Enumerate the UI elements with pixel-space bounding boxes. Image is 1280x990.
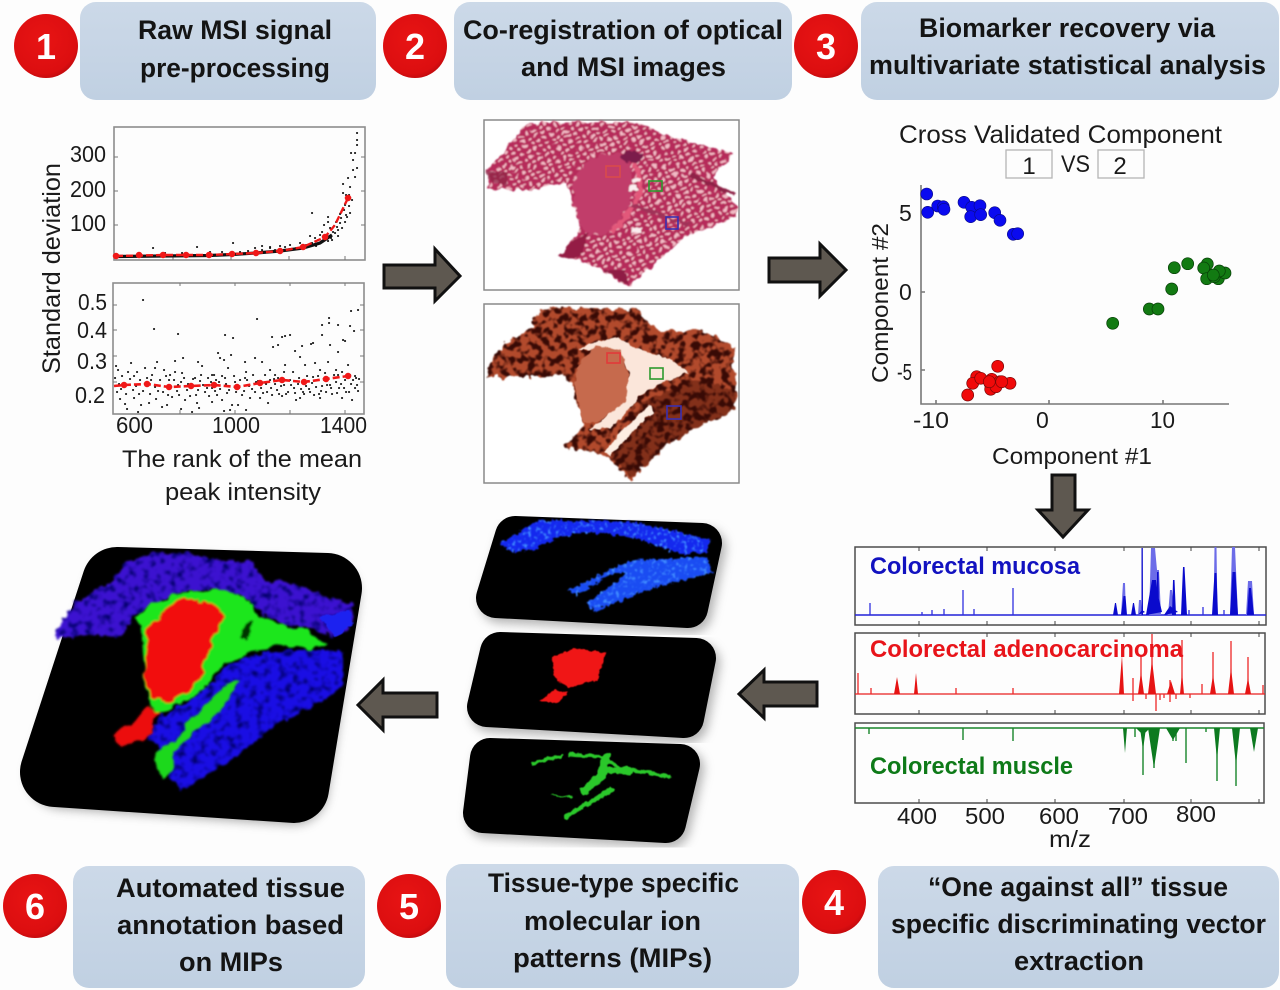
- chart: standard deviation scatter plots: [38, 127, 367, 506]
- axis labels: 10: [1150, 407, 1175, 433]
- panel: step 2 header: and MSI images: [521, 52, 726, 82]
- component selector: 2: [1113, 153, 1127, 180]
- icon: number 1 badge: [14, 14, 78, 78]
- panel: step 4 header: extraction: [1014, 946, 1144, 976]
- panel: step 4 header: “One against all” tissue: [928, 872, 1228, 902]
- panel: step 4 header: specific discriminating vector: [891, 909, 1266, 939]
- panel: step 4 header: [878, 866, 1279, 988]
- spectrum: colorectal adenocarcinoma: [855, 633, 1265, 714]
- green cluster: [1107, 258, 1231, 329]
- panel: step 3 header: multivariate statistical analysis: [869, 50, 1266, 80]
- m/z axis labels: [897, 801, 1216, 852]
- chart: upper plot: [70, 127, 365, 260]
- icon: number 4 badge: 4: [824, 882, 844, 923]
- axis labels: 0: [899, 279, 912, 305]
- panel: optical tissue image: [484, 120, 739, 290]
- axis labels: -10: [913, 407, 949, 433]
- panel: step 5 header: [446, 864, 799, 988]
- chart: lower plot: 0.2: [75, 382, 105, 408]
- panel: step 6 header: Automated tissue: [116, 873, 345, 903]
- chart: upper plot: 100: [70, 210, 106, 236]
- m/z axis labels: m/z: [1049, 826, 1091, 852]
- m/z axis labels: 700: [1108, 803, 1148, 829]
- panel: step 1 header: Raw MSI signal: [138, 15, 332, 45]
- axis labels: Component #1: [992, 443, 1152, 469]
- component selector: [1006, 150, 1144, 180]
- axis labels: 5: [899, 200, 912, 226]
- panel: green muscle ion pattern: [483, 755, 684, 828]
- chart: lower plot: 0.3: [77, 348, 107, 374]
- icon: number 3 badge: [794, 14, 858, 78]
- m/z axis labels: 400: [897, 803, 937, 829]
- panel: red adenocarcinoma ion pattern: [487, 648, 700, 723]
- panel: combined tissue annotation image: [55, 552, 353, 790]
- arrow: step 1 to step 2: [384, 249, 460, 301]
- axis title: rank of the mean peak intensity: peak intensity: [165, 479, 321, 506]
- panel: step 5 header: molecular ion: [524, 906, 701, 936]
- icon: number 3 badge: 3: [816, 26, 836, 67]
- component selector: VS: [1061, 151, 1090, 178]
- chart title: Cross Validated Component: [899, 121, 1222, 149]
- chart: upper plot: 300: [70, 141, 106, 167]
- axis title: rank of the mean peak intensity: [122, 446, 362, 506]
- component selector: 1: [1022, 153, 1036, 180]
- panel: step 3 header: [861, 2, 1279, 100]
- icon: number 2 badge: 2: [405, 26, 425, 67]
- arrow: step 4 to step 5: [739, 670, 817, 718]
- region markers: [606, 166, 678, 229]
- icon: number 5 badge: 5: [399, 886, 419, 927]
- chart: lower plot: 1400: [320, 412, 367, 438]
- MSI tissue map: [488, 307, 738, 480]
- icon: number 5 badge: [377, 874, 441, 938]
- chart: lower plot: 1000: [212, 412, 260, 438]
- chart: discriminating spectra: [855, 547, 1266, 852]
- m/z axis labels: 500: [965, 803, 1005, 829]
- panel: step 5 header: Tissue-type specific: [488, 868, 739, 898]
- panel: step 1 header: [80, 2, 376, 100]
- panel: blue mucosa ion pattern: [496, 520, 712, 613]
- spectrum: colorectal muscle: Colorectal muscle: [870, 753, 1073, 780]
- tissue section: [487, 122, 737, 287]
- spectrum: colorectal muscle: [855, 723, 1264, 803]
- chart: lower plot: 600: [116, 412, 153, 438]
- ion overlays: [55, 552, 353, 790]
- panel: step 2 header: Co-registration of optical: [463, 15, 783, 45]
- axis labels: Component #2: [867, 223, 893, 383]
- arrow: step 3 to step 4: [1038, 475, 1088, 537]
- chart: lower plot: 0.5: [78, 289, 107, 315]
- m/z axis labels: 600: [1039, 803, 1079, 829]
- panel: step 3 header: Biomarker recovery via: [919, 13, 1216, 43]
- axis labels: 0: [1036, 407, 1049, 433]
- axis title: standard deviation: Standard deviation: [38, 163, 66, 374]
- arrow: step 5 to step 6: [358, 680, 437, 730]
- axis labels: [867, 200, 1175, 469]
- axis labels: -5: [897, 359, 912, 385]
- spectrum: colorectal mucosa: [855, 547, 1266, 625]
- panel: step 2 header: [454, 2, 792, 100]
- icon: number 6 badge: 6: [25, 886, 45, 927]
- axis title: rank of the mean peak intensity: The rank of the mean: [122, 446, 362, 473]
- chart: PLS component scatter plot: [867, 121, 1231, 469]
- m/z axis labels: 800: [1176, 801, 1216, 827]
- red cluster: [962, 360, 1016, 401]
- arrow: step 2 to step 3: [769, 244, 846, 296]
- region markers: [607, 353, 681, 419]
- chart: lower plot: [75, 283, 367, 438]
- panel: step 5 header: patterns (MIPs): [513, 943, 712, 973]
- panel: step 6 header: on MIPs: [179, 947, 283, 977]
- icon: number 4 badge: [802, 870, 866, 934]
- chart: lower plot: 0.4: [77, 317, 107, 343]
- panel: step 6 header: annotation based: [117, 910, 344, 940]
- chart: upper plot: 200: [70, 176, 106, 202]
- icon: number 2 badge: [383, 14, 447, 78]
- spectrum: colorectal adenocarcinoma: Colorectal adenocarcinoma: [870, 636, 1184, 663]
- spectrum: colorectal mucosa: Colorectal mucosa: [870, 553, 1081, 580]
- panel: step 1 header: pre-processing: [140, 53, 330, 83]
- blue cluster: [921, 188, 1024, 240]
- icon: number 6 badge: [3, 874, 67, 938]
- panel: MSI intensity image: [484, 304, 739, 483]
- panel: step 6 header: [73, 866, 365, 988]
- icon: number 1 badge: 1: [36, 26, 56, 67]
